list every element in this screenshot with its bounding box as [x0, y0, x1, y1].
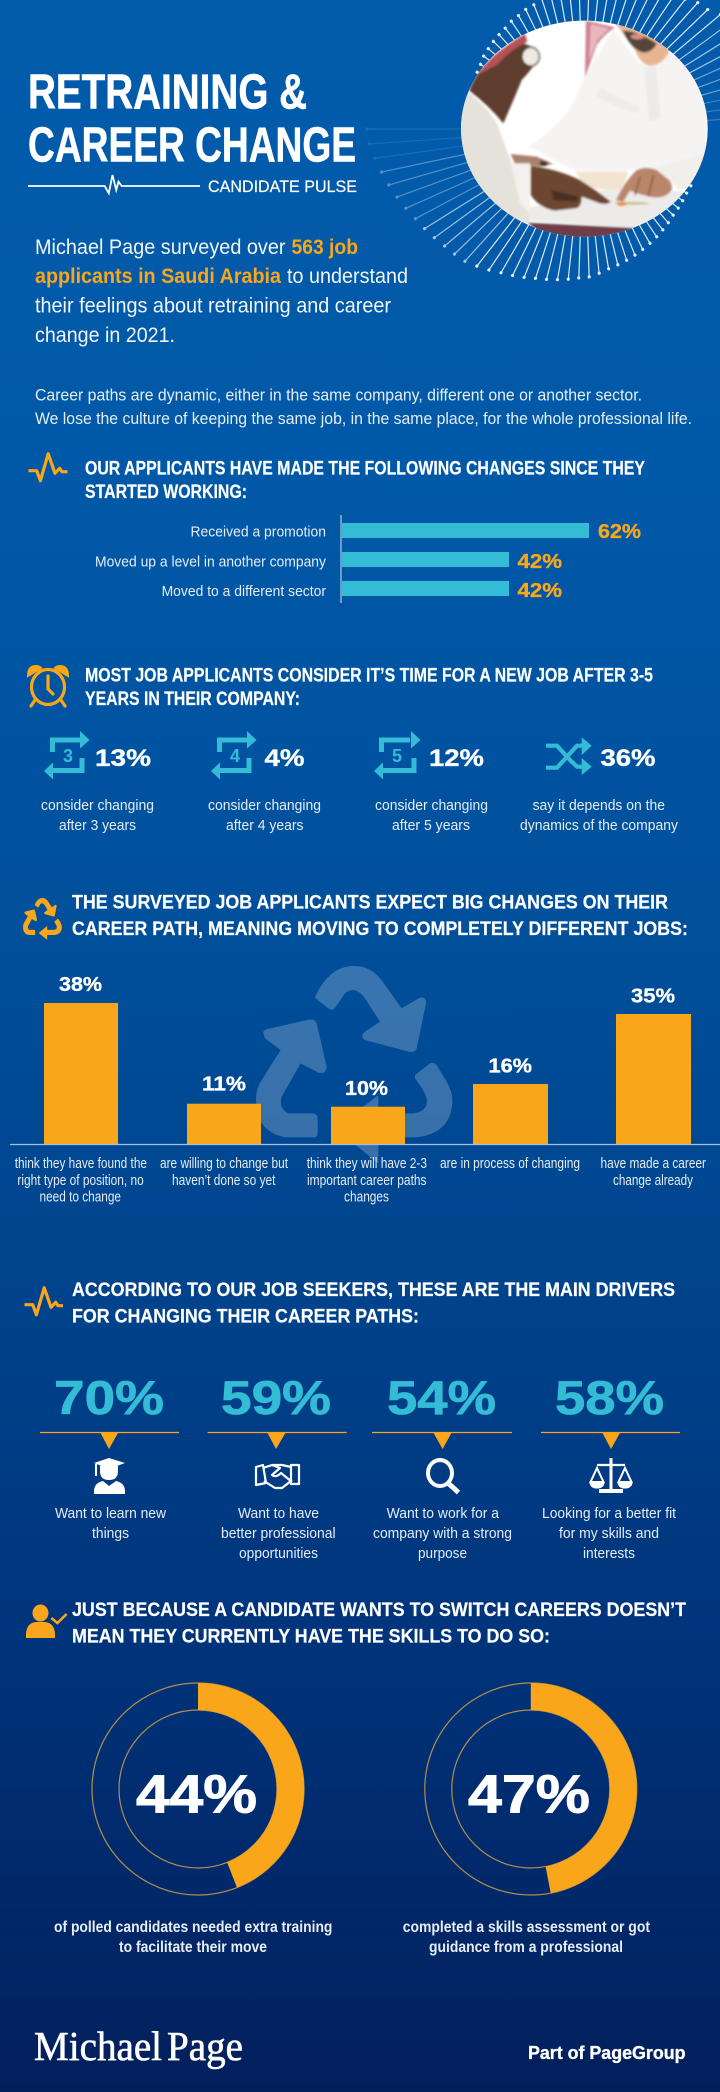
icon: person with check: [26, 1604, 67, 1638]
donut chart: 47%: [425, 1683, 637, 1895]
caption: 47%: guidance from a professional: [429, 1939, 623, 1956]
pulse divider line: [28, 175, 200, 193]
stat: after 5 years: 12%: [429, 745, 484, 772]
intro paragraph: change in 2021.: [35, 324, 175, 347]
heading: [72, 892, 688, 940]
bar caption 5: change already: [613, 1172, 693, 1189]
intro paragraph: their feelings about retraining and career: [35, 294, 391, 318]
secondary paragraph: Career paths are dynamic, either in the same company, different one or another sector.: [35, 386, 642, 404]
bar caption 3: [307, 1155, 427, 1206]
heading: ACCORDING TO OUR JOB SEEKERS, THESE ARE THE MAIN DRIVERS: [72, 1279, 675, 1301]
driver: better fit: interests: [583, 1545, 635, 1562]
caption: 44%: to facilitate their move: [119, 1939, 267, 1956]
bar caption 1: think they have found the: [15, 1155, 147, 1172]
driver: learn new things: 70%: [54, 1371, 164, 1424]
intro paragraph: Michael Page surveyed over: [35, 236, 286, 259]
bar caption 3: changes: [344, 1189, 389, 1206]
heading: THE SURVEYED JOB APPLICANTS EXPECT BIG CHANGES ON THEIR: [72, 892, 668, 914]
bar caption 5: [600, 1155, 706, 1189]
heading: [72, 1599, 686, 1648]
bar caption 2: haven’t done so yet: [172, 1172, 276, 1189]
donut chart: 47%: 47%: [468, 1765, 590, 1825]
intro paragraph: 563 job: [292, 236, 358, 259]
icon: repeat 4: 4: [230, 746, 240, 766]
driver: better fit: Looking for a better fit: [542, 1505, 677, 1522]
stat: after 3 years: after 3 years: [59, 817, 136, 834]
bar caption 1: need to change: [40, 1189, 121, 1206]
panel: changes since they started working: [28, 454, 645, 603]
bar chart: career changes: Received a promotion: [190, 524, 326, 541]
driver: professional opportunities: Want to have: [238, 1505, 319, 1522]
driver: learn new things: Want to learn new: [55, 1505, 166, 1522]
heading: MEAN THEY CURRENTLY HAVE THE SKILLS TO DO SO:: [72, 1626, 550, 1648]
icon: repeat 3: 3: [63, 746, 73, 766]
stat: depends on company: say it depends on the: [533, 797, 665, 814]
intro paragraph: applicants in Saudi Arabia: [35, 265, 281, 288]
bar chart: career changes: 42%: [518, 580, 562, 602]
bar chart: career changes: [95, 515, 641, 603]
bar chart: career changes: Moved up a level in another company: [95, 554, 326, 571]
bar chart: career path expectations: [10, 974, 720, 1206]
bar chart: career changes: 42%: [518, 551, 562, 573]
icon: alarm clock: [28, 666, 68, 706]
stat: after 3 years: [41, 731, 154, 834]
stat: after 4 years: consider changing: [208, 797, 321, 814]
stat: after 4 years: [208, 731, 321, 834]
caption: 44%: of polled candidates needed extra training: [54, 1919, 332, 1936]
icon: magnifying glass: [428, 1460, 458, 1492]
icon: handshake: [256, 1465, 299, 1488]
stat: after 5 years: consider changing: [375, 797, 488, 814]
stat: depends on company: [520, 737, 678, 834]
heading: [85, 665, 653, 710]
stat: depends on company: 36%: [600, 745, 656, 772]
stat: after 3 years: 13%: [95, 745, 151, 772]
title: CAREER CHANGE: [28, 118, 356, 172]
stat: after 4 years: after 4 years: [226, 817, 304, 834]
bar caption 4: are in process of changing: [440, 1155, 580, 1172]
driver: professional opportunities: better professional: [221, 1525, 336, 1542]
watermark: recycle arrows: [256, 966, 452, 1163]
stat: after 5 years: [374, 731, 488, 834]
donut chart: 44%: [92, 1683, 304, 1895]
bar caption 1: [15, 1155, 147, 1206]
caption: 47%: [403, 1919, 651, 1956]
heading: [85, 458, 645, 503]
caption: 47%: completed a skills assessment or got: [403, 1919, 651, 1936]
icon: graduate: [94, 1458, 125, 1494]
title: RETRAINING &: [28, 66, 307, 120]
heading: STARTED WORKING:: [85, 481, 247, 503]
bar caption 2: [160, 1155, 289, 1189]
photo: two men reviewing a document: [461, 20, 708, 237]
driver: better fit: for my skills and: [559, 1525, 659, 1542]
icon: shuffle: [546, 737, 592, 775]
heading: [72, 1279, 675, 1328]
title: [28, 66, 356, 172]
subtitle: candidate pulse: CANDIDATE PULSE: [208, 177, 357, 196]
driver: learn new things: [40, 1371, 179, 1542]
footer note: Part of PageGroup: [528, 2043, 686, 2063]
bar chart: career path expectations: 11%: [202, 1074, 246, 1096]
bar chart: career changes: Moved to a different sector: [162, 583, 326, 600]
caption: 44%: [54, 1919, 332, 1956]
stat: depends on company: dynamics of the company: [520, 817, 678, 834]
stat: after 5 years: after 5 years: [392, 817, 470, 834]
driver: strong purpose: Want to work for a: [387, 1505, 500, 1522]
stat: after 3 years: consider changing: [41, 797, 154, 814]
panel: expected career path changes: [10, 892, 720, 1206]
bar caption 1: right type of position, no: [17, 1172, 144, 1189]
secondary paragraph: [35, 386, 692, 428]
driver: strong purpose: purpose: [418, 1545, 467, 1562]
driver: learn new things: things: [92, 1525, 129, 1542]
driver: better fit: [541, 1371, 680, 1562]
icon: pulse: [24, 1288, 63, 1315]
donut chart: 44%: 44%: [136, 1765, 257, 1825]
logo: Michael Page: Michael Page: [34, 2023, 243, 2069]
panel: skills to switch careers: [26, 1599, 686, 1956]
bar chart: career path expectations: 10%: [345, 1078, 388, 1100]
bar caption 3: think they will have 2-3: [307, 1155, 427, 1172]
bar chart: career changes: 62%: [598, 521, 641, 543]
intro paragraph: to understand: [287, 265, 408, 288]
bar caption 3: important career paths: [307, 1172, 426, 1189]
intro paragraph: [35, 236, 408, 347]
bar chart: career path expectations: 38%: [59, 974, 102, 996]
icon: scales: [590, 1458, 632, 1491]
heading: FOR CHANGING THEIR CAREER PATHS:: [72, 1306, 419, 1328]
panel: main drivers for changing career paths: [24, 1279, 680, 1562]
icon: repeat 5: 5: [392, 746, 402, 766]
bar chart: career path expectations: 16%: [488, 1056, 532, 1078]
bar caption 2: are willing to change but: [160, 1155, 289, 1172]
icon: recycle arrows: [23, 898, 62, 940]
driver: strong purpose: [372, 1371, 512, 1562]
driver: better fit: 58%: [555, 1371, 664, 1424]
panel: when applicants consider a new job: [28, 665, 678, 834]
icon: pulse: [28, 454, 68, 481]
bar chart: career path expectations: 35%: [631, 986, 675, 1008]
driver: strong purpose: 54%: [387, 1371, 496, 1424]
driver: strong purpose: company with a strong: [373, 1525, 512, 1542]
driver: professional opportunities: 59%: [221, 1371, 331, 1424]
driver: professional opportunities: [208, 1371, 347, 1562]
stat: after 4 years: 4%: [264, 745, 304, 772]
driver: professional opportunities: opportunities: [239, 1545, 318, 1562]
heading: YEARS IN THEIR COMPANY:: [85, 688, 300, 710]
sunburst rays around photo: [367, 0, 720, 280]
